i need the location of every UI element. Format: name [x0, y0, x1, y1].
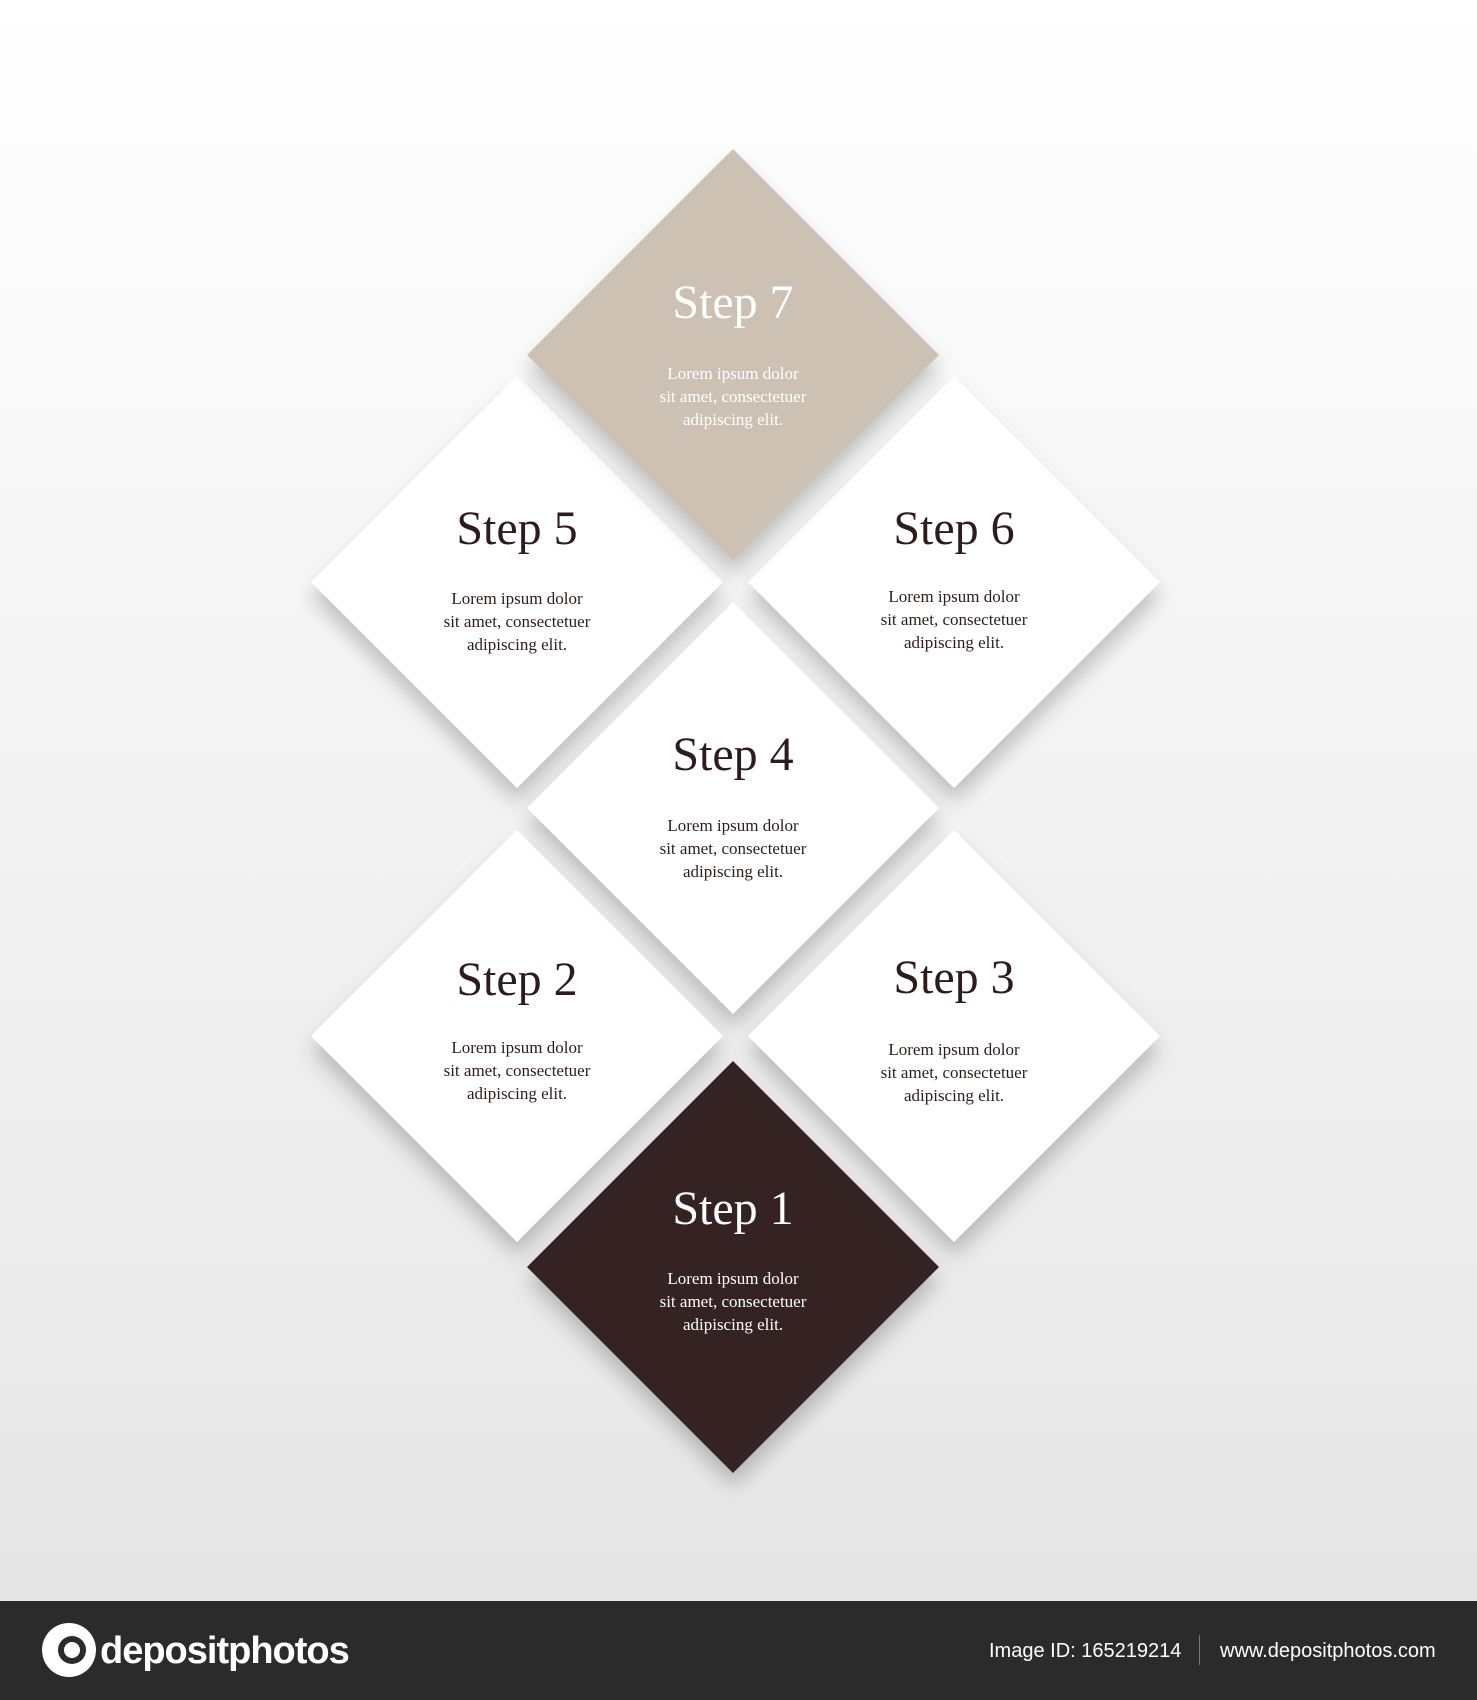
diamond: step 5: adipiscing elit. — [467, 635, 567, 654]
diamond: step 2: Step 2 — [456, 953, 578, 1006]
footer bar — [0, 1601, 1477, 1700]
diamond: step 6: sit amet, consectetuer — [881, 610, 1028, 629]
diamond: step 3: sit amet, consectetuer — [881, 1063, 1028, 1082]
diamond: step 4: Step 4 — [672, 728, 794, 781]
diamond: step 3: Lorem ipsum dolor — [888, 1040, 1020, 1059]
diamond: step 6: Step 6 — [893, 502, 1015, 555]
diamond: step 1 — [527, 1061, 939, 1473]
diamond: step 7 — [527, 149, 939, 561]
diamond: step 5: sit amet, consectetuer — [444, 612, 591, 631]
diamond: step 4: adipiscing elit. — [683, 862, 783, 881]
diamond: step 6: Lorem ipsum dolor — [888, 587, 1020, 606]
icon: logo — [42, 1623, 96, 1677]
footer url: www.depositphotos.com — [1219, 1640, 1436, 1662]
diamond: step 5: Step 5 — [456, 502, 578, 555]
diamond: step 3: Step 3 — [893, 951, 1015, 1004]
diamond: step 7: Step 7 — [672, 276, 794, 329]
diamond: step 4 — [527, 602, 939, 1014]
footer image id: Image ID: 165219214 — [989, 1640, 1181, 1662]
diamond: step 2: adipiscing elit. — [467, 1084, 567, 1103]
diamond: step 7: adipiscing elit. — [683, 410, 783, 429]
diamond: step 1: adipiscing elit. — [683, 1315, 783, 1334]
diamond: step 7: sit amet, consectetuer — [660, 387, 807, 406]
diamond: step 4: sit amet, consectetuer — [660, 839, 807, 858]
footer logo text: depositphotos — [100, 1630, 349, 1672]
diamond: step 2 — [311, 830, 723, 1242]
diamond: step 1: Step 1 — [672, 1182, 794, 1235]
diamond: step 4: Lorem ipsum dolor — [667, 816, 799, 835]
diamond: step 5 — [311, 376, 723, 788]
diamond: step 7: Lorem ipsum dolor — [667, 364, 799, 383]
diamond: step 1: Lorem ipsum dolor — [667, 1269, 799, 1288]
diamond: step 5: Lorem ipsum dolor — [451, 589, 583, 608]
diamond: step 1: sit amet, consectetuer — [660, 1292, 807, 1311]
diamond: step 6: adipiscing elit. — [904, 633, 1004, 652]
diamond: step 6 — [748, 376, 1160, 788]
diamond: step 3 — [748, 830, 1160, 1242]
diamond: step 3: adipiscing elit. — [904, 1086, 1004, 1105]
diamond: step 2: sit amet, consectetuer — [444, 1061, 591, 1080]
diamond: step 2: Lorem ipsum dolor — [451, 1038, 583, 1057]
